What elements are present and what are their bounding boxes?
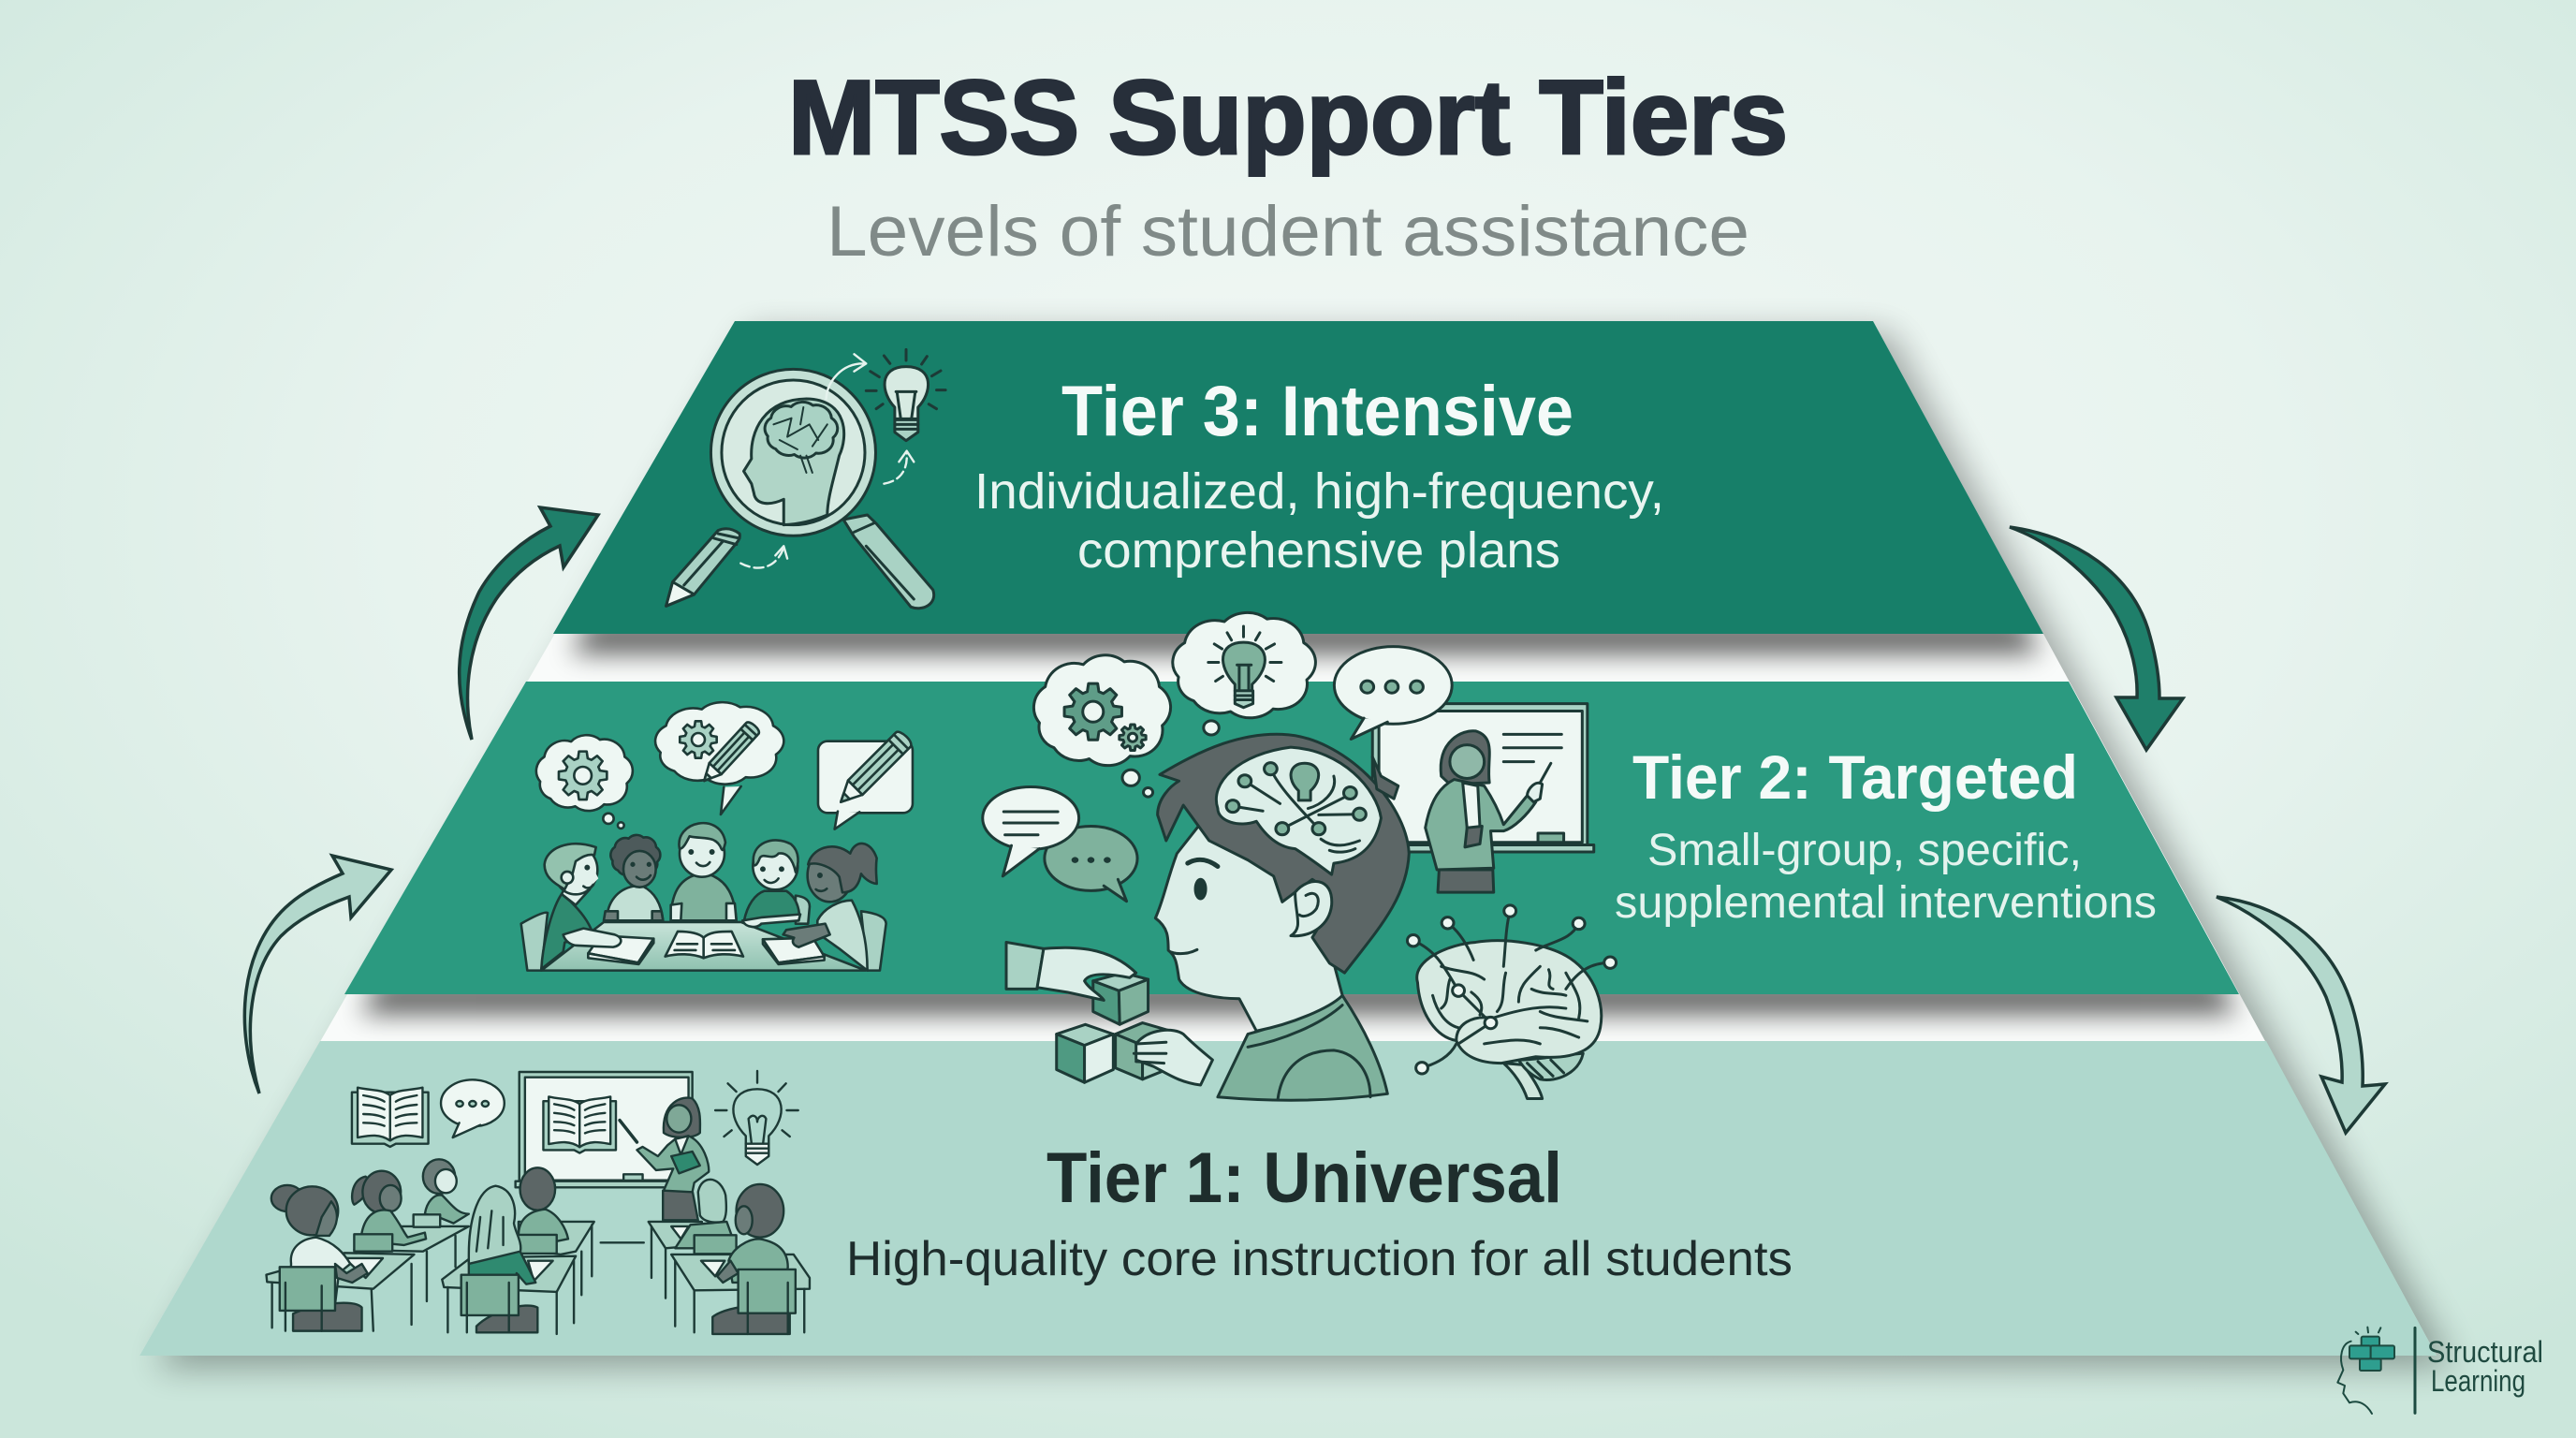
panel: tier 3 intensive (553, 321, 2043, 634)
logo mark (2337, 1328, 2415, 1414)
tier 3 description: Individualized, high-frequency, (974, 463, 1664, 520)
tier 1 heading: Tier 1: Universal (1046, 1138, 1562, 1218)
tier 3 heading: Tier 3: Intensive (1061, 372, 1573, 451)
magnifier lens (710, 369, 875, 536)
logo wordmark: Structural (2427, 1335, 2543, 1369)
arrow: tier 2 to tier 1 (2217, 897, 2385, 1133)
title: MTSS Support Tiers (788, 59, 1788, 176)
student 5 (808, 844, 877, 971)
small arrows (740, 354, 914, 568)
ear (1291, 882, 1332, 936)
icon: light bulb (715, 1071, 798, 1165)
panel: tier 2 targeted (344, 682, 2239, 994)
table (541, 922, 866, 971)
brain in head (1216, 747, 1381, 874)
panel: tier 1 universal (139, 1041, 2437, 1356)
student long hair right (671, 1180, 737, 1254)
boy (1155, 734, 1409, 1100)
speech bubble with dots (1334, 647, 1452, 739)
illustration: boy thinking with brain and ideas (983, 612, 1617, 1100)
tier 3 description (974, 463, 1664, 579)
shirt (1218, 995, 1387, 1100)
thought cloud with gears (1033, 655, 1171, 797)
books on table (588, 932, 825, 964)
student back left (414, 1159, 469, 1227)
student ponytail (352, 1171, 426, 1252)
chairs (521, 913, 548, 971)
student 1 (541, 844, 598, 969)
desks front row (266, 1253, 810, 1334)
desks back row (354, 1222, 702, 1301)
pencil (666, 529, 739, 606)
student curly front right (701, 1184, 796, 1334)
student bun front left (271, 1185, 383, 1331)
arrow: tier 2 to tier 3 (460, 507, 598, 740)
student 3 (671, 823, 737, 920)
thought cloud with gear (536, 735, 633, 829)
speech bubbles left (983, 786, 1137, 902)
hair (1158, 734, 1409, 973)
tier 2 description: supplemental interventions (1615, 878, 2157, 928)
student back centre (516, 1167, 568, 1254)
tier 1 description: High-quality core instruction for all students (846, 1232, 1793, 1286)
speech cloud with gear and pencil (655, 702, 783, 814)
tier 3 description: comprehensive plans (1077, 522, 1560, 579)
hands on books (564, 915, 830, 947)
teacher (620, 1098, 709, 1220)
icon: open book (352, 1088, 429, 1147)
thought cloud with bulb (1173, 612, 1315, 735)
tier 2 description: Small-group, specific, (1647, 826, 2082, 875)
hand with cubes (1006, 942, 1212, 1085)
tier 2 heading: Tier 2: Targeted (1632, 742, 2078, 812)
teacher (1426, 731, 1551, 892)
whiteboard (516, 1072, 693, 1187)
arrow: tier 1 to tier 2 (244, 856, 391, 1093)
student 4 (744, 840, 799, 920)
arrow: tier 3 to tier 2 (2010, 527, 2183, 750)
speech bubble with pencil (818, 729, 914, 829)
light bulb (885, 367, 929, 418)
student 2 (604, 835, 663, 920)
subtitle: Levels of student assistance (827, 192, 1749, 271)
student long hair centre (461, 1186, 553, 1332)
pyramid (139, 321, 2453, 1367)
head profile (744, 399, 844, 525)
tier 2 description (1615, 826, 2157, 928)
whiteboard (1372, 704, 1594, 852)
logo: Structural Learning: Learning (2431, 1364, 2525, 1398)
icon: speech bubble (441, 1079, 505, 1137)
illustration: small group of students (521, 702, 914, 971)
logo: Structural Learning (2337, 1328, 2543, 1414)
brain (765, 402, 838, 458)
brain with neurons (1407, 905, 1617, 1098)
face (1155, 818, 1342, 1031)
icon: magnifier with brain, bulb and pencil (666, 349, 945, 609)
illustration: whole class with teacher (266, 1071, 810, 1334)
magnifier handle (843, 515, 934, 609)
